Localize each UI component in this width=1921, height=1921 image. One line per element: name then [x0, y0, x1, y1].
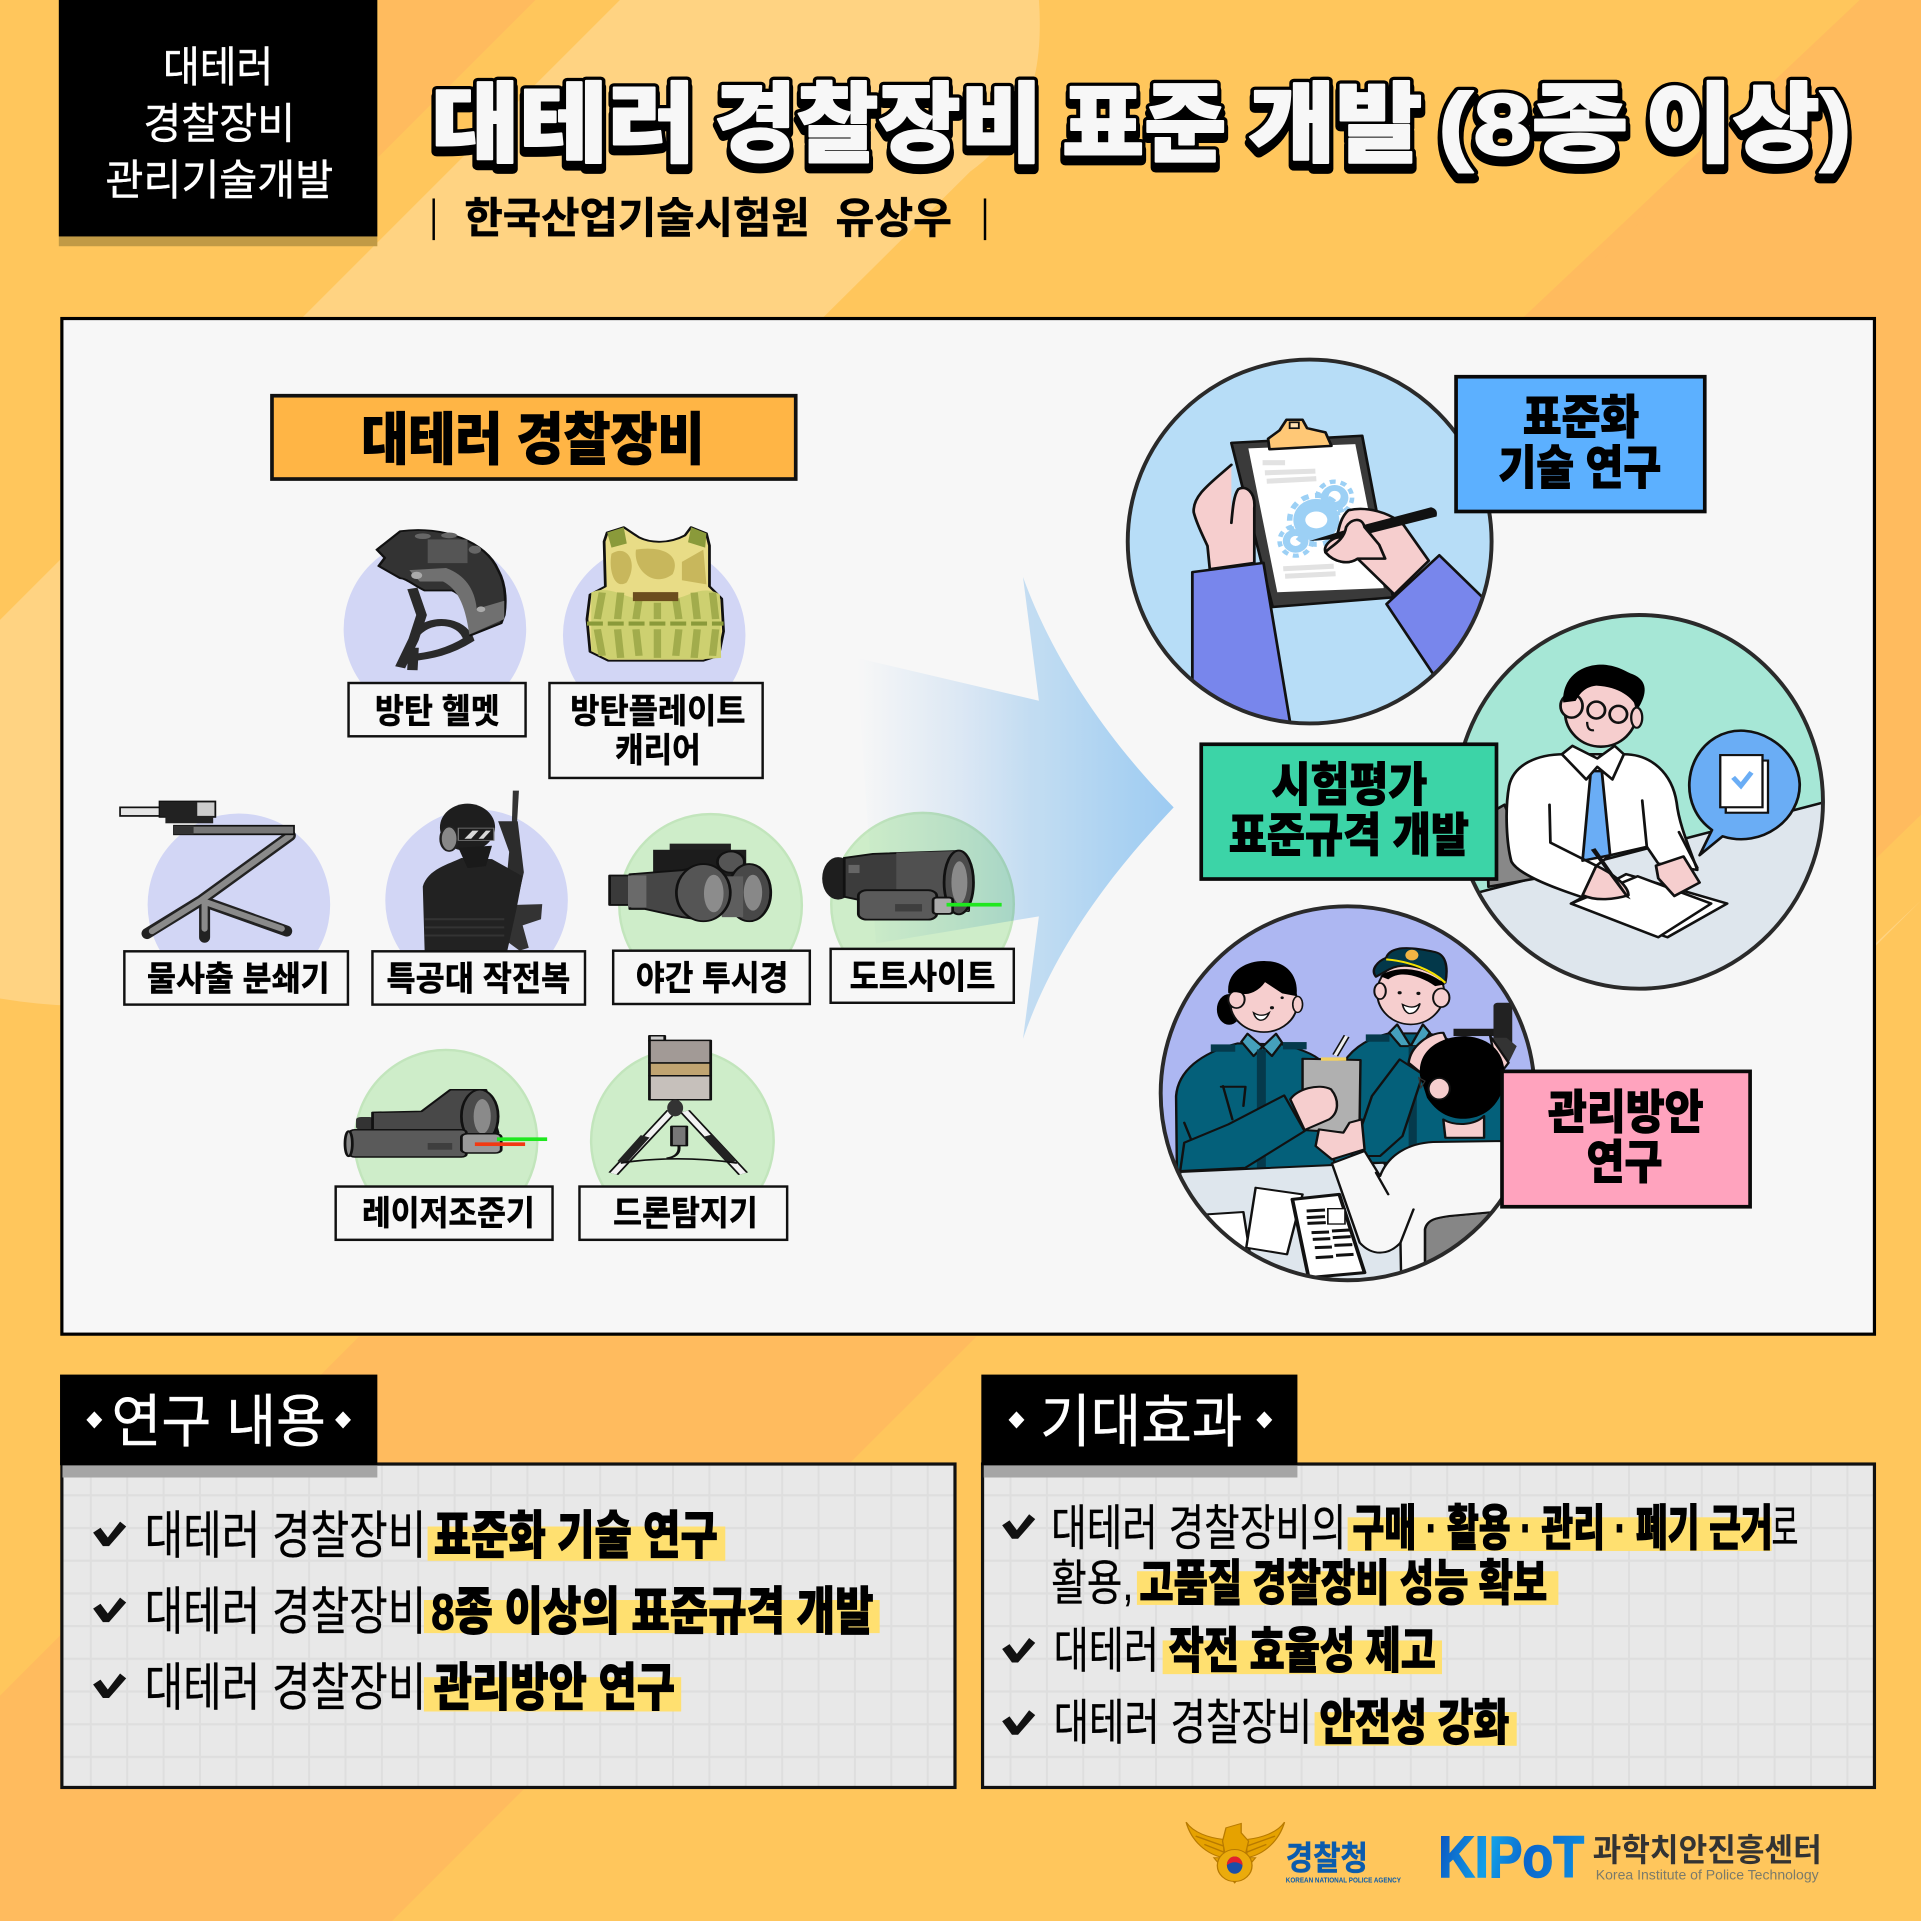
title: 대테러: [431, 82, 696, 179]
main panel: [62, 319, 1874, 1334]
label: 물사출 분쇄기: 물사출 분쇄기: [147, 961, 330, 999]
callout: 관리방안 연구: 연구: [1587, 1137, 1662, 1189]
subtitle: author: [432, 195, 986, 243]
title: 대테러: [431, 76, 696, 173]
title: (8종: [1438, 76, 1628, 173]
list item: 8종 이상의 표준규격 개발: 대테러 경찰장비: [145, 1582, 426, 1640]
arrow: [856, 577, 1174, 1039]
logo: Korean National Police Agency: [1186, 1822, 1401, 1884]
icon: dot sight: [822, 851, 1002, 920]
callout: 시험평가 표준규격 개발: [1201, 744, 1496, 879]
heading tab: 기대효과: [981, 1375, 1297, 1478]
label: 방탄플레이트 캐리어: 방탄플레이트: [570, 693, 745, 731]
illustration: police officers and manager: [1161, 906, 1535, 1286]
list item: 구매 활용 관리 폐기 근거: 고품질 경찰장비 성능 확보: [1139, 1557, 1547, 1611]
icon: night vision goggles: [610, 844, 771, 921]
heading: 대테러 경찰장비: [272, 396, 796, 479]
label: 방탄 헬멧: [349, 683, 526, 736]
list item: 관리방안 연구: [93, 1658, 681, 1716]
callout: 관리방안 연구: [1502, 1071, 1750, 1207]
label: 방탄 헬멧: 방탄 헬멧: [375, 693, 500, 731]
list item: 구매 활용 관리 폐기 근거: 활용,: [1051, 1557, 1133, 1611]
header tag: 대테러 경찰장비 관리기술개발: 경찰장비: [143, 100, 295, 148]
icon: plate carrier vest: [587, 527, 724, 661]
list item: 관리방안 연구: 관리방안 연구: [434, 1658, 675, 1716]
icon: laser sight: [345, 1090, 547, 1157]
icon: drone detector: [613, 1036, 743, 1174]
list item: 안전성 강화: [1002, 1697, 1517, 1751]
label: 도트사이트: [831, 949, 1014, 1003]
title: 개발: [1248, 76, 1422, 173]
panel: research content: [60, 1375, 955, 1787]
list item: 표준화 기술 연구: 표준화 기술 연구: [434, 1506, 718, 1564]
title: 이상): [1645, 76, 1851, 173]
title: 대테러: [431, 76, 696, 173]
label: 특공대 작전복: 특공대 작전복: [387, 961, 570, 999]
label: 드론탐지기: 드론탐지기: [613, 1195, 758, 1233]
title: [431, 76, 1851, 179]
icon: special forces uniform: [423, 791, 542, 951]
icon: water jet disruptor: [120, 801, 294, 937]
label: 도트사이트: 도트사이트: [850, 959, 995, 997]
title: 경찰장비: [714, 76, 1043, 173]
heading tab: 기대효과: 기대효과: [1040, 1390, 1242, 1454]
list item: 8종 이상의 표준규격 개발: 8종 이상의 표준규격 개발: [431, 1582, 874, 1640]
title: (8종: [1438, 76, 1628, 173]
callout: 표준화 기술 연구: [1456, 377, 1705, 511]
header tag: 대테러 경찰장비 관리기술개발: [59, 0, 377, 246]
label: 드론탐지기: [579, 1187, 787, 1240]
list item: 구매 활용 관리 폐기 근거: 로: [1772, 1502, 1798, 1556]
subtitle: author: 한국산업기술시험원: [464, 195, 810, 243]
logo: KIPoT: Korea Institute of Police Technology: [1596, 1867, 1819, 1882]
icon: ballistic helmet: [377, 530, 505, 670]
heading tab: 연구 내용: 연구 내용: [111, 1390, 326, 1454]
list item: 작전 효율성 제고: 작전 효율성 제고: [1169, 1624, 1436, 1678]
subtitle: author: 유상우: [836, 195, 952, 243]
callout: 표준화 기술 연구: 기술 연구: [1498, 442, 1661, 494]
logo: KIPoT: KIPoT: [1438, 1825, 1584, 1890]
list item: 8종 이상의 표준규격 개발: [93, 1582, 880, 1640]
list item: 구매 활용 관리 폐기 근거: 대테러 경찰장비의: [1051, 1502, 1346, 1556]
icon: police eagle emblem: [1186, 1822, 1285, 1883]
title: 표준: [1062, 76, 1226, 173]
list item: 안전성 강화: 대테러 경찰장비: [1054, 1697, 1312, 1751]
list item: 구매 활용 관리 폐기 근거: [1002, 1502, 1798, 1611]
list item: 표준화 기술 연구: [93, 1506, 725, 1564]
title: (8종: [1438, 82, 1628, 179]
label: 특공대 작전복: [372, 951, 585, 1005]
list item: 작전 효율성 제고: [1002, 1624, 1442, 1678]
heading tab: 연구 내용: [60, 1375, 377, 1478]
logo: KIPoT: [1438, 1825, 1822, 1890]
callout: 시험평가 표준규격 개발: 시험평가: [1272, 759, 1427, 811]
callout: 관리방안 연구: 관리방안: [1548, 1086, 1704, 1138]
label: 방탄플레이트 캐리어: 캐리어: [615, 732, 701, 770]
list item: 작전 효율성 제고: 대테러: [1054, 1624, 1159, 1678]
title: 표준: [1062, 76, 1226, 173]
logo: Korean National Police Agency: KOREAN NATIONAL POLICE AGENCY: [1286, 1875, 1401, 1884]
title: 표준: [1062, 82, 1226, 179]
logo: Korean National Police Agency: 경찰청: [1286, 1841, 1368, 1878]
list item: 표준화 기술 연구: 대테러 경찰장비: [145, 1506, 426, 1564]
panel: expected effects: [981, 1375, 1874, 1787]
label: 레이저조준기: [336, 1187, 553, 1240]
callout: 표준화 기술 연구: 표준화: [1523, 392, 1639, 444]
header tag: 대테러 경찰장비 관리기술개발: 대테러: [163, 44, 273, 92]
title: 이상): [1645, 82, 1851, 179]
label: 야간 투시경: 야간 투시경: [636, 960, 788, 998]
title: 경찰장비: [714, 76, 1043, 173]
title: 경찰장비: [714, 82, 1043, 179]
title: 개발: [1248, 76, 1422, 173]
header tag: 대테러 경찰장비 관리기술개발: 관리기술개발: [105, 157, 333, 205]
list item: 관리방안 연구: 대테러 경찰장비: [145, 1658, 426, 1716]
label: 방탄플레이트 캐리어: [549, 683, 763, 778]
title: 이상): [1645, 76, 1851, 173]
logo: KIPoT: 과학치안진흥센터: [1593, 1832, 1822, 1868]
illustration: standardization clipboard: [1128, 360, 1492, 723]
label: 레이저조준기: 레이저조준기: [362, 1195, 535, 1233]
illustration: testing and evaluation researcher: [1455, 615, 1826, 996]
equipment background circles: [148, 538, 1014, 1232]
label: 야간 투시경: [613, 951, 810, 1004]
heading: 대테러 경찰장비: 대테러 경찰장비: [361, 408, 704, 471]
title: 개발: [1248, 82, 1422, 179]
callout: 시험평가 표준규격 개발: 표준규격 개발: [1229, 809, 1469, 861]
label: 물사출 분쇄기: [124, 951, 348, 1005]
list item: 안전성 강화: 안전성 강화: [1319, 1697, 1509, 1751]
